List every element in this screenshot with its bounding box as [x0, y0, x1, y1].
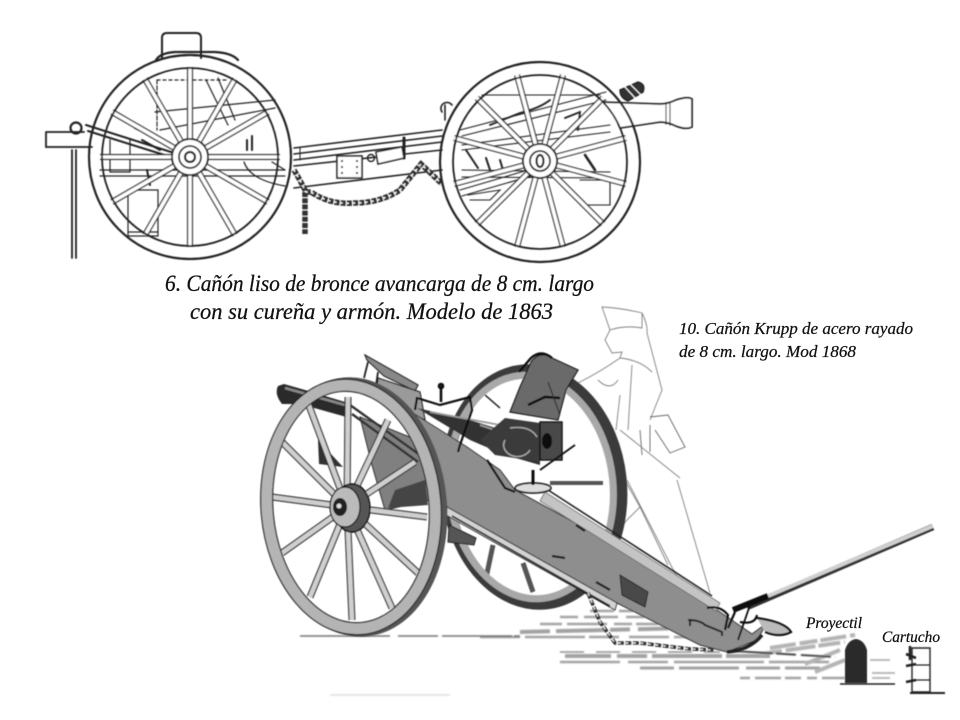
- barrel: [277, 384, 350, 418]
- gun carriage trail: [413, 413, 767, 652]
- limber pole end: [46, 122, 190, 163]
- cartridge: [906, 646, 945, 693]
- connecting perch: [294, 130, 442, 188]
- ramrod: [733, 526, 933, 640]
- label: projectile: Proyectil: [805, 615, 862, 632]
- caption: cannon 6: 6. Cañón liso de bronce avancarga de 8 cm. largo: [165, 271, 594, 296]
- carriage framework: [441, 92, 610, 205]
- rear wheel: [435, 362, 633, 612]
- trunnion handle: [415, 384, 575, 493]
- projectile: [840, 639, 895, 684]
- breech and barrel top: [417, 408, 562, 465]
- front carriage cheek: [318, 405, 430, 510]
- wheel left: [89, 55, 291, 259]
- hanging prop: [72, 150, 76, 258]
- seat: [510, 354, 578, 420]
- bronze barrel: [600, 82, 692, 128]
- illustration: cannon 10, Krupp rifled steel: [250, 354, 945, 693]
- trail chain: [588, 593, 715, 650]
- wheel right: [440, 62, 640, 262]
- trail hook: [757, 618, 791, 635]
- limber framework: [100, 78, 285, 236]
- caption: cannon 10: 10. Cañón Krupp de acero rayado: [679, 319, 913, 338]
- illustration: soldier behind the Krupp gun: [578, 307, 710, 593]
- label: cartridge: Cartucho: [882, 629, 940, 646]
- limber seat and handle: [156, 33, 238, 60]
- front wheel: [250, 372, 455, 642]
- ground shadow: [300, 611, 895, 695]
- chain: [294, 164, 442, 234]
- top rail: [364, 355, 425, 420]
- caption: cannon 10, second line: de 8 cm. largo. Mod 1868: [679, 342, 856, 361]
- illustration: cannon 6, smoothbore bronze with limber: [46, 33, 692, 262]
- caption: cannon 6, second line: con su cureña y armón. Modelo de 1863: [190, 299, 553, 324]
